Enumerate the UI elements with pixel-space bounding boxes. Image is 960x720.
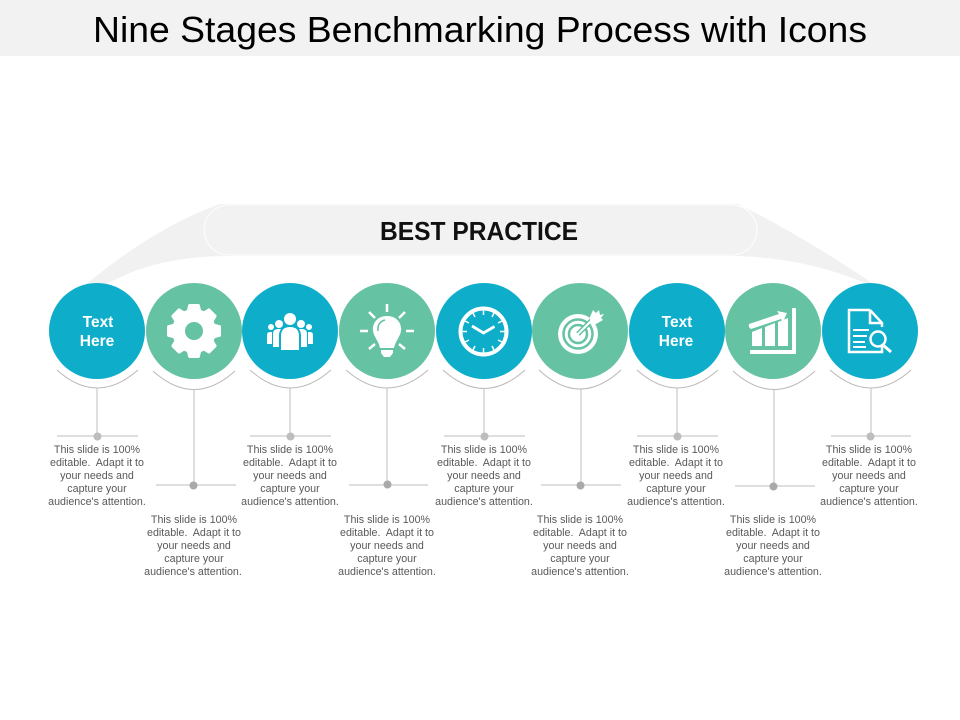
stage 8: growth chart icon: audience's attention.: [724, 566, 822, 578]
stage 1: text here: Text: [83, 314, 113, 331]
title: Nine Stages Benchmarking Process with Icons: [93, 9, 867, 50]
stage 5: clock icon: editable. Adapt it to: [437, 457, 531, 469]
stage 9: document search icon: audience's attention.: [820, 496, 918, 508]
stage 2: gear icon: audience's attention.: [144, 566, 242, 578]
title: [0, 0, 960, 56]
stage 6: target icon: audience's attention.: [531, 566, 629, 578]
stage 6: target icon: capture your: [550, 553, 610, 565]
stage 3: team icon: capture your: [260, 483, 320, 495]
stage 7: text here: Here: [659, 333, 694, 350]
stage 6: target icon: [531, 283, 629, 578]
stage 3: team icon: This slide is 100%: [247, 444, 334, 456]
stage 7: text here: editable. Adapt it to: [629, 457, 723, 469]
stage 5: clock icon: [435, 283, 533, 508]
stage 4: light bulb icon: editable. Adapt it to: [340, 527, 434, 539]
stage 7: text here: This slide is 100%: [633, 444, 720, 456]
stage 1: text here: [48, 283, 146, 508]
stage 9: document search icon: [820, 283, 918, 508]
stage 4: light bulb icon: audience's attention.: [338, 566, 436, 578]
stage 4: light bulb icon: This slide is 100%: [344, 514, 431, 526]
stage 4: light bulb icon: your needs and: [350, 540, 424, 552]
stage 6: target icon: This slide is 100%: [537, 514, 624, 526]
stage 7: text here: your needs and: [639, 470, 713, 482]
stage 7: text here: Text: [662, 314, 692, 331]
stage 1: text here: Here: [80, 333, 115, 350]
stage 5: clock icon: This slide is 100%: [441, 444, 528, 456]
stage 9: document search icon: your needs and: [832, 470, 906, 482]
stage 5: clock icon: capture your: [454, 483, 514, 495]
stage 4: light bulb icon: capture your: [357, 553, 417, 565]
stage 1: text here: This slide is 100%: [54, 444, 141, 456]
stage 1: text here: editable. Adapt it to: [50, 457, 144, 469]
stage 7: text here: [627, 283, 725, 508]
stage 6: target icon: editable. Adapt it to: [533, 527, 627, 539]
stage 2: gear icon: editable. Adapt it to: [147, 527, 241, 539]
stage 1: text here: audience's attention.: [48, 496, 146, 508]
stage 2: gear icon: [144, 283, 242, 578]
stage 8: growth chart icon: This slide is 100%: [730, 514, 817, 526]
stage 3: team icon: editable. Adapt it to: [243, 457, 337, 469]
stage 6: target icon: your needs and: [543, 540, 617, 552]
stage 9: document search icon: capture your: [839, 483, 899, 495]
stage 3: team icon: [241, 283, 339, 508]
stage 9: document search icon: This slide is 100%: [826, 444, 913, 456]
stage 8: growth chart icon: editable. Adapt it to: [726, 527, 820, 539]
stage 3: team icon: your needs and: [253, 470, 327, 482]
stage 2: gear icon: This slide is 100%: [151, 514, 238, 526]
stage 5: clock icon: your needs and: [447, 470, 521, 482]
stage 4: light bulb icon: [338, 283, 436, 578]
stage 9: document search icon: editable. Adapt it to: [822, 457, 916, 469]
stage 1: text here: capture your: [67, 483, 127, 495]
stage 2: gear icon: your needs and: [157, 540, 231, 552]
stage 1: text here: your needs and: [60, 470, 134, 482]
stage 8: growth chart icon: your needs and: [736, 540, 810, 552]
stage 5: clock icon: audience's attention.: [435, 496, 533, 508]
banner: best practice: [85, 204, 872, 285]
stage 8: growth chart icon: [724, 283, 822, 578]
stage 7: text here: audience's attention.: [627, 496, 725, 508]
stage 2: gear icon: capture your: [164, 553, 224, 565]
banner: best practice: BEST PRACTICE: [380, 216, 578, 246]
stage 8: growth chart icon: capture your: [743, 553, 803, 565]
stage 3: team icon: audience's attention.: [241, 496, 339, 508]
stage 7: text here: capture your: [646, 483, 706, 495]
